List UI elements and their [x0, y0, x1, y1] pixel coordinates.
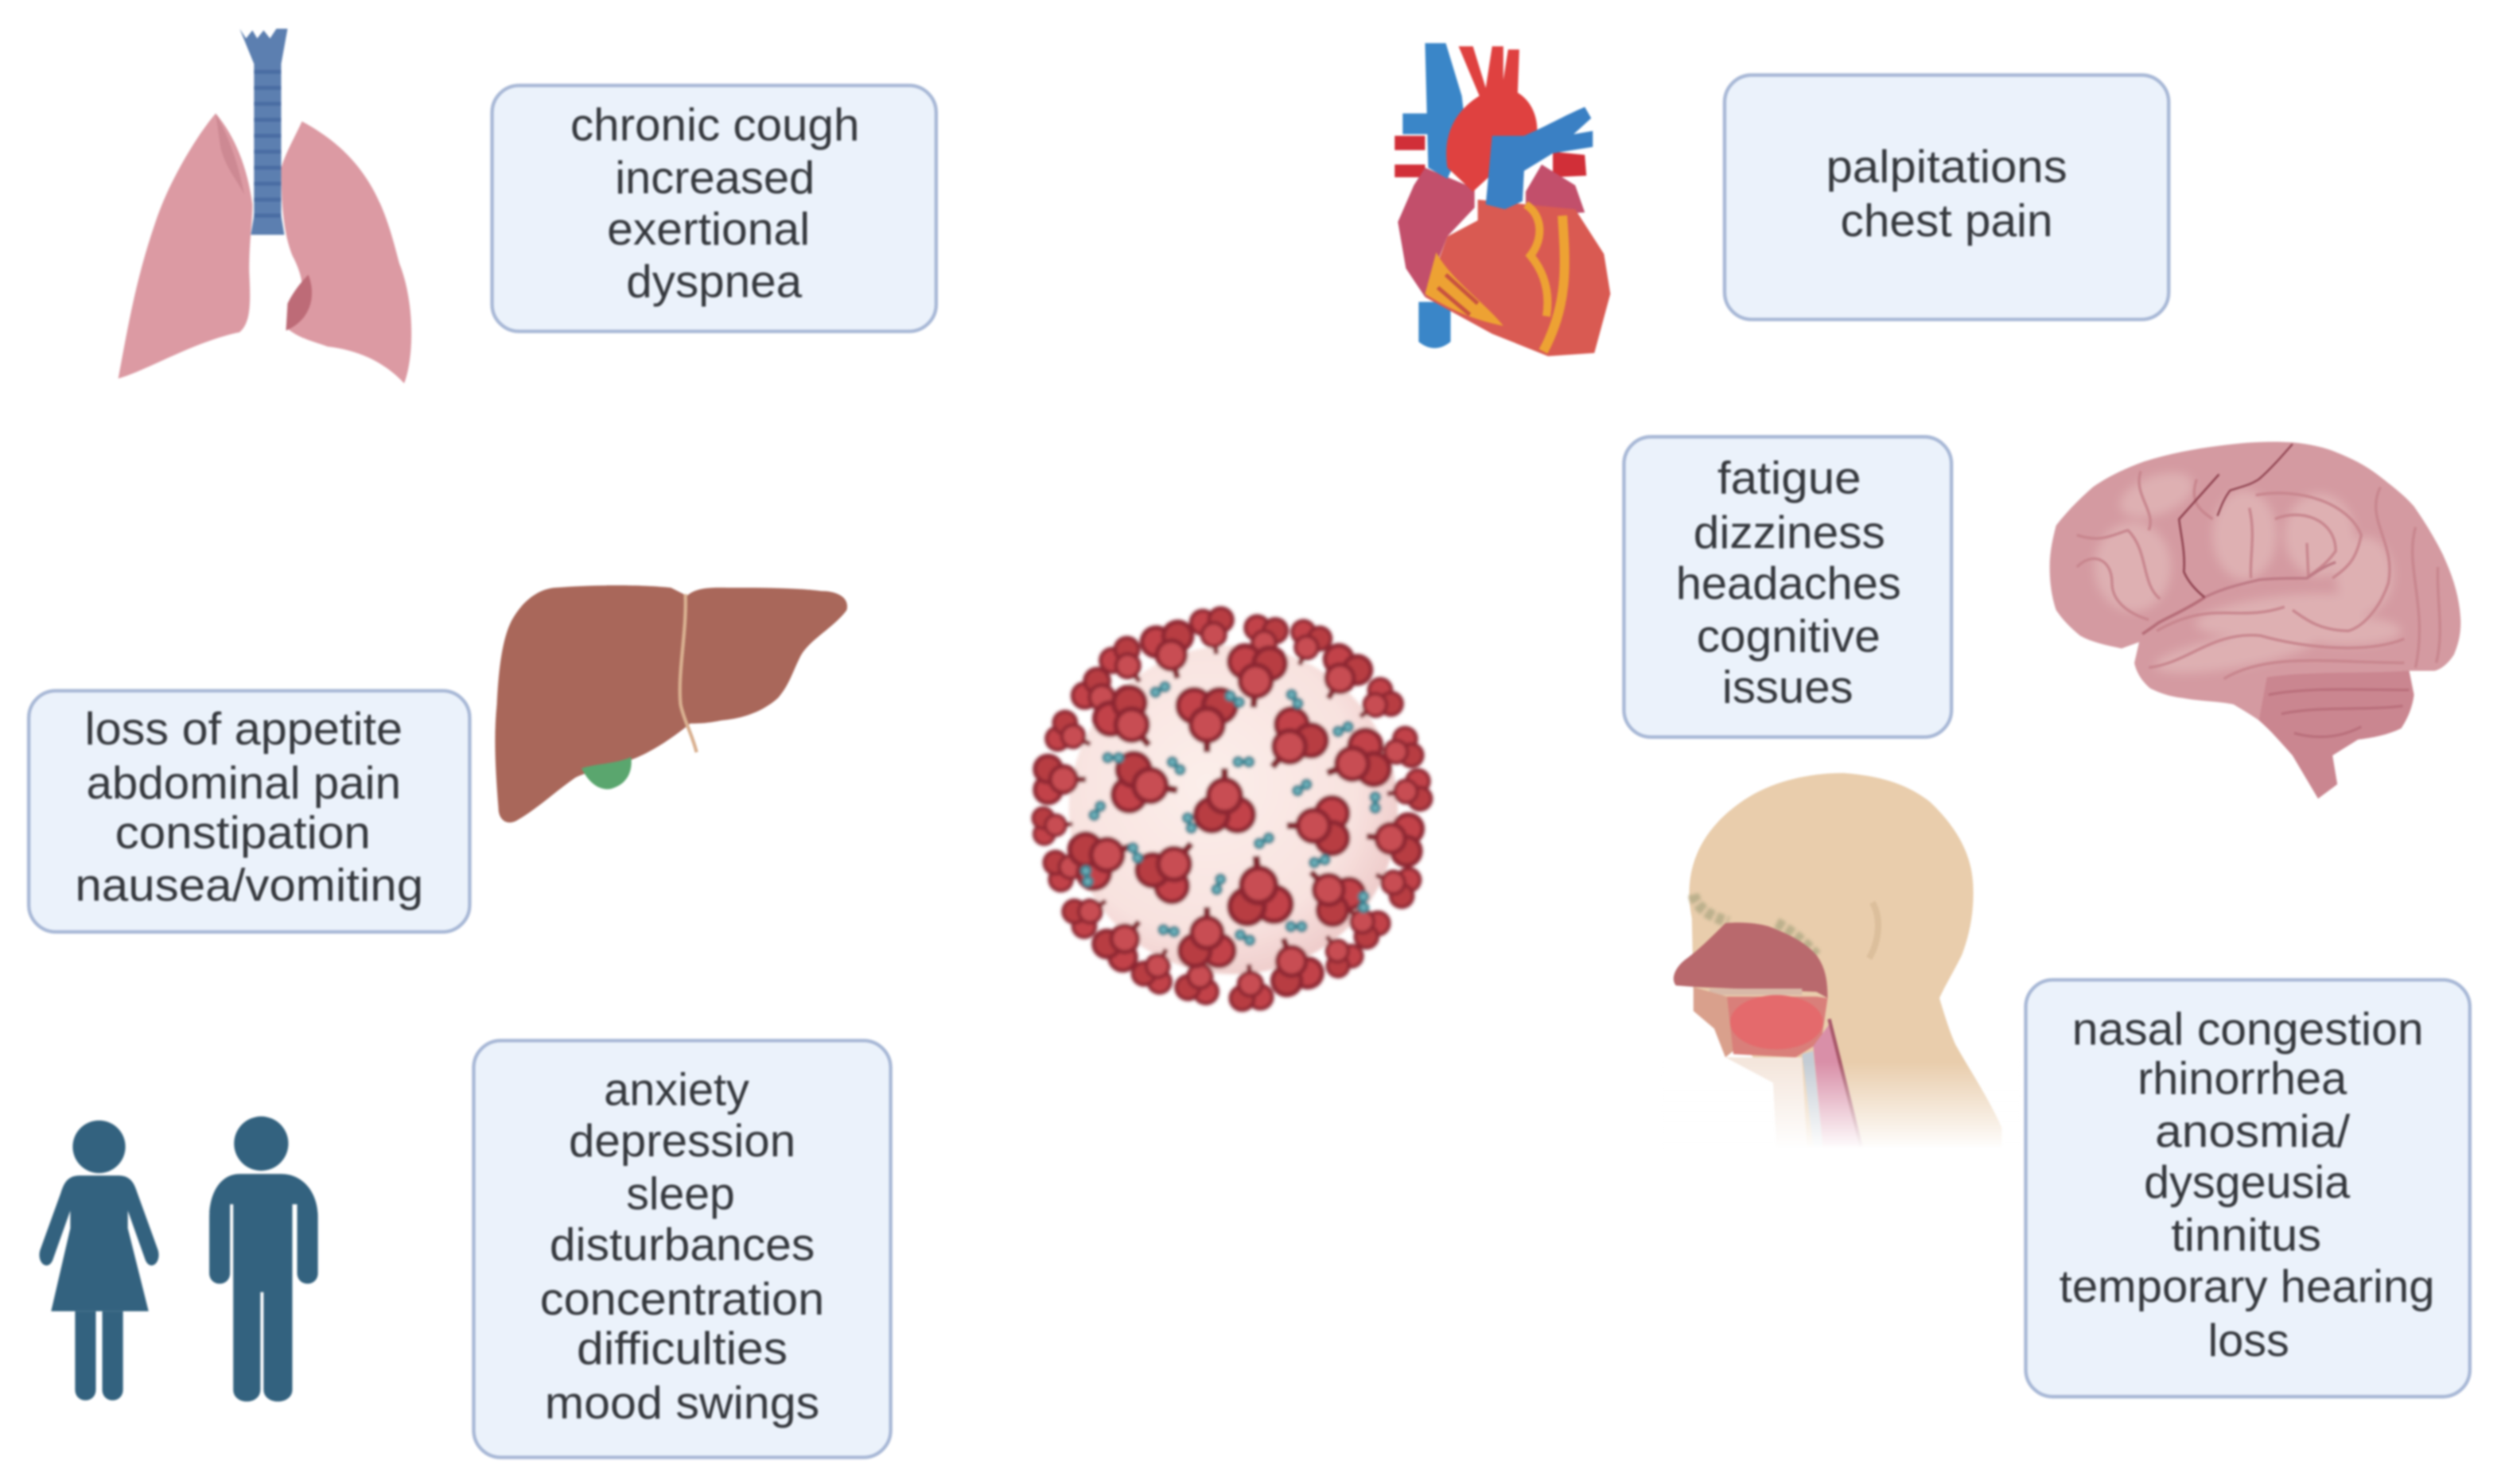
- panel: psychological symptoms: disturbances: [550, 1220, 815, 1271]
- panel: respiratory symptoms: increased: [615, 153, 815, 204]
- panel: gastrointestinal symptoms: nausea/vomiting: [75, 860, 423, 911]
- panel: psychological symptoms: difficulties: [577, 1323, 788, 1374]
- panel: psychological symptoms: sleep: [626, 1168, 735, 1219]
- panel: upper airway and sensory symptoms: nasal congestion: [2072, 1004, 2424, 1055]
- icon: virus: [1033, 607, 1433, 1011]
- panel: psychological symptoms: depression: [569, 1116, 795, 1167]
- panel: gastrointestinal symptoms: constipation: [115, 807, 371, 858]
- panel: respiratory symptoms: [492, 85, 936, 332]
- panel: upper airway and sensory symptoms: loss: [2207, 1315, 2289, 1366]
- panel: neurological symptoms: fatigue: [1717, 453, 1861, 504]
- icon: lungs: [119, 29, 411, 383]
- panel: neurological symptoms: dizziness: [1694, 507, 1885, 558]
- panel: respiratory symptoms: chronic cough: [570, 100, 859, 151]
- panel: gastrointestinal symptoms: loss of appetite: [84, 704, 403, 755]
- icon: liver: [495, 585, 847, 822]
- panel: gastrointestinal symptoms: [29, 691, 469, 932]
- panel: upper airway and sensory symptoms: rhinorrhea: [2137, 1054, 2347, 1105]
- panel: psychological symptoms: anxiety: [604, 1065, 749, 1116]
- panel: upper airway and sensory symptoms: anosmia/: [2155, 1106, 2350, 1157]
- panel: gastrointestinal symptoms: abdominal pain: [86, 758, 401, 809]
- panel: upper airway and sensory symptoms: dysgeusia: [2144, 1157, 2350, 1208]
- panel: cardiac symptoms: chest pain: [1841, 196, 2053, 247]
- icon: male figure: [209, 1117, 318, 1401]
- panel: respiratory symptoms: dyspnea: [626, 257, 802, 308]
- panel: neurological symptoms: headaches: [1676, 558, 1901, 609]
- panel: neurological symptoms: cognitive: [1697, 611, 1881, 662]
- panel: neurological symptoms: [1624, 437, 1951, 737]
- panel: neurological symptoms: issues: [1722, 662, 1853, 713]
- panel: psychological symptoms: concentration: [540, 1274, 824, 1325]
- icon: heart: [1394, 43, 1610, 356]
- icon: female figure: [39, 1121, 159, 1400]
- panel: psychological symptoms: mood swings: [545, 1377, 819, 1428]
- panel: upper airway and sensory symptoms: temporary hearing: [2060, 1261, 2435, 1312]
- panel: psychological symptoms: [473, 1040, 891, 1458]
- panel: cardiac symptoms: [1725, 75, 2169, 320]
- icon: head and neck section: [1662, 773, 2021, 1150]
- panel: respiratory symptoms: exertional: [607, 204, 810, 254]
- panel: upper airway and sensory symptoms: [2026, 980, 2470, 1397]
- panel: cardiac symptoms: palpitations: [1826, 142, 2067, 192]
- icon: brain: [2050, 442, 2460, 798]
- panel: upper airway and sensory symptoms: tinnitus: [2171, 1210, 2321, 1261]
